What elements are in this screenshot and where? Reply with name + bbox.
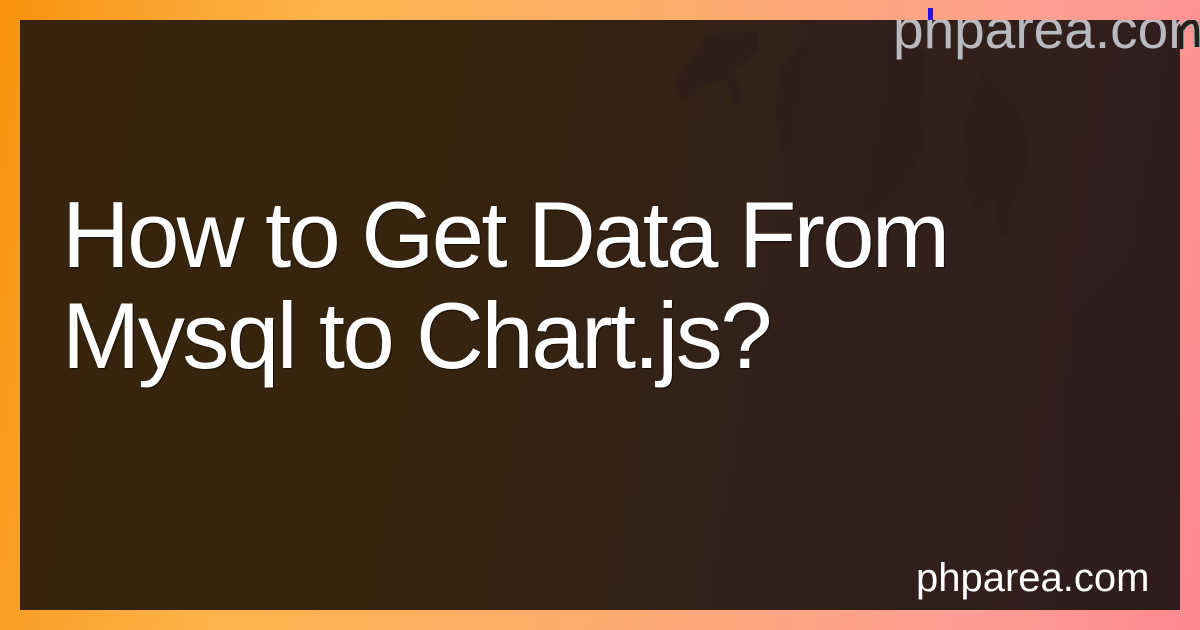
title: How to Get Data From bbox=[62, 182, 947, 287]
logo end glyph outside the panel bbox=[1180, 20, 1200, 49]
footer site name: phparea.com bbox=[916, 556, 1149, 600]
icon: blue cursor mark bbox=[928, 8, 933, 20]
title bbox=[62, 182, 947, 389]
title: Mysql to Chart.js? bbox=[62, 283, 770, 388]
